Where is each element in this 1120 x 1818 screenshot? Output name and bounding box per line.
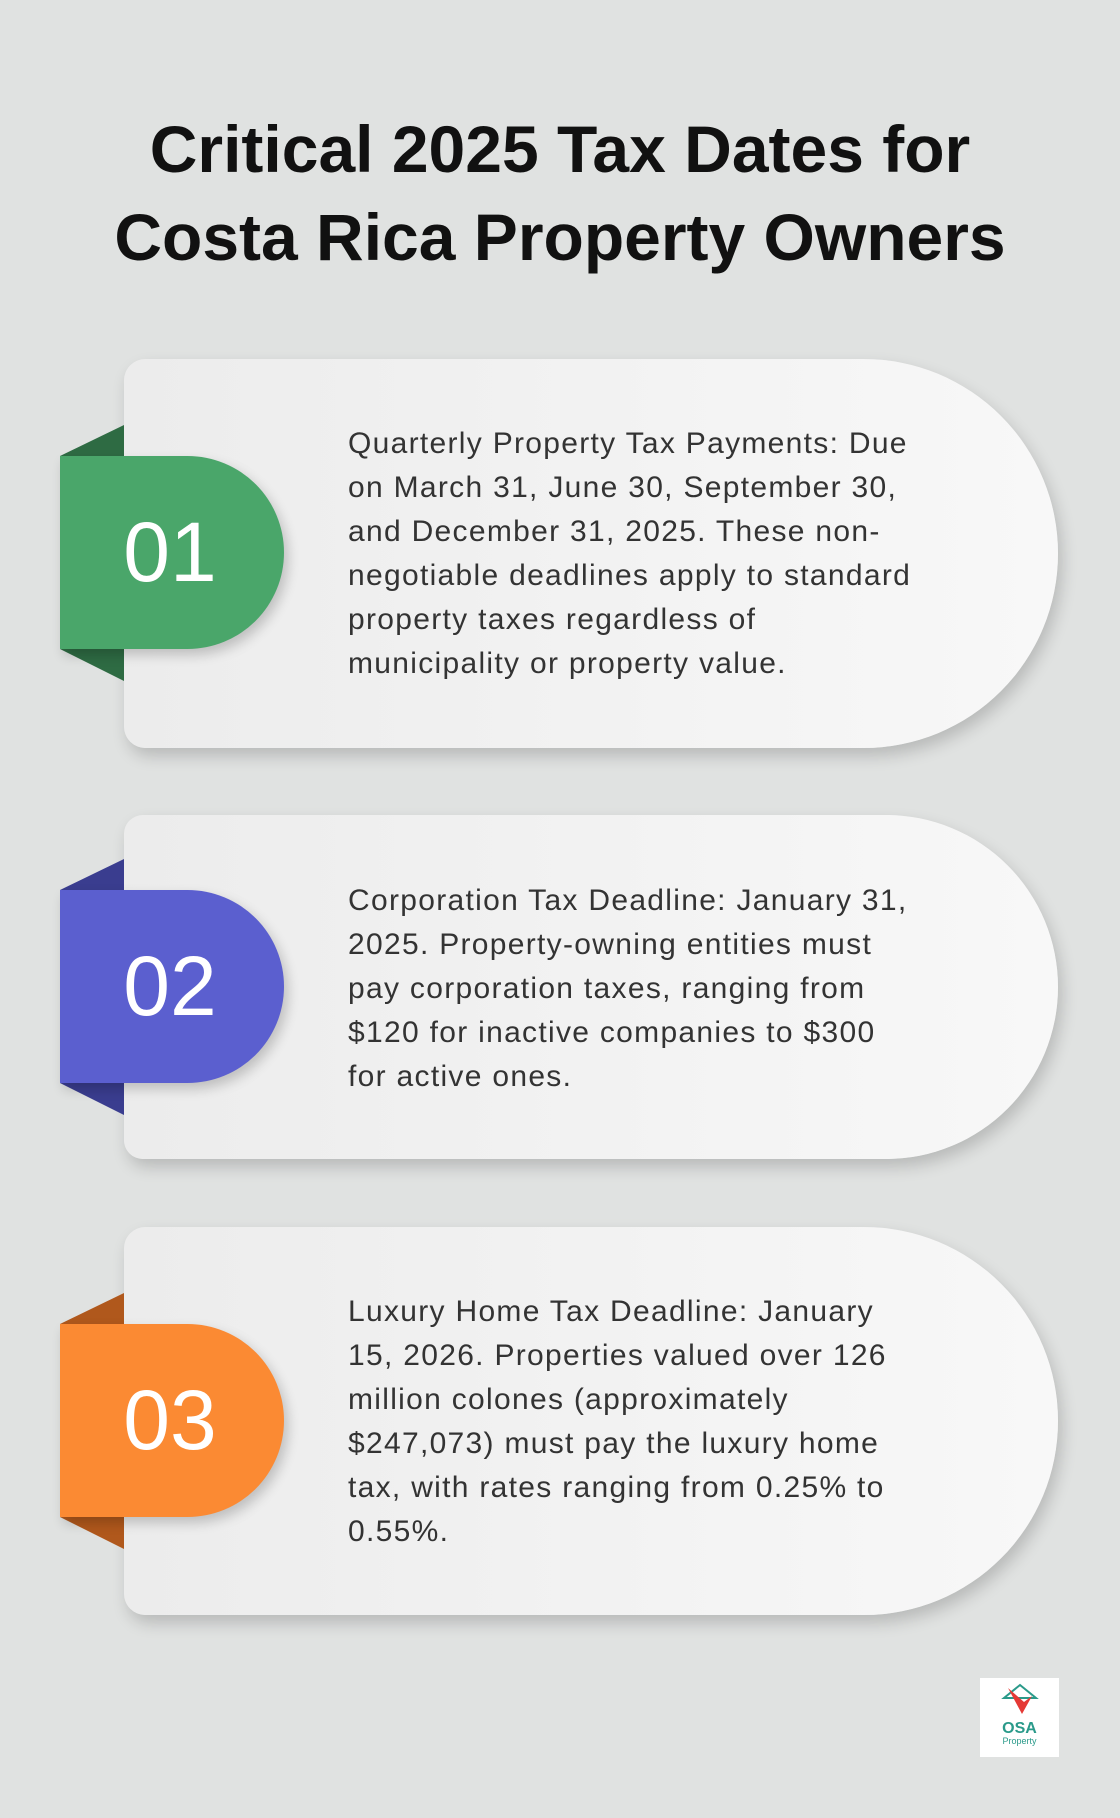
text block 3: million colones (approximately [348, 1383, 789, 1416]
badge 03 [60, 1324, 284, 1517]
title [114, 112, 1006, 274]
badge 01: 01 [123, 505, 217, 599]
text block 1: and December 31, 2025. These non- [348, 515, 881, 548]
icon: fold top 3 [60, 1293, 124, 1324]
text block 2: Corporation Tax Deadline: January 31, [348, 884, 908, 917]
text block 1: municipality or property value. [348, 647, 787, 680]
text block 2: $120 for inactive companies to $300 [348, 1016, 875, 1049]
icon: fold top 1 [60, 425, 124, 456]
panel: card 3 [124, 1227, 1058, 1615]
logo [980, 1678, 1059, 1757]
logo: Property [1002, 1736, 1036, 1746]
badge 03: 03 [123, 1373, 217, 1467]
icon: fold bottom 2 [60, 1083, 124, 1115]
text block 1: property taxes regardless of [348, 603, 756, 636]
text block 3: tax, with rates ranging from 0.25% to [348, 1471, 885, 1504]
title: Critical 2025 Tax Dates for [150, 112, 970, 186]
text block 1: on March 31, June 30, September 30, [348, 471, 897, 504]
text block 2: pay corporation taxes, ranging from [348, 972, 865, 1005]
text block 3 [348, 1295, 887, 1548]
text block 2: for active ones. [348, 1060, 572, 1093]
icon: fold top 2 [60, 859, 124, 890]
badge 01 [60, 456, 284, 649]
text block 1: Quarterly Property Tax Payments: Due [348, 427, 908, 460]
panel: card 2 [124, 815, 1058, 1159]
badge 02: 02 [123, 939, 217, 1033]
icon: fold bottom 3 [60, 1517, 124, 1549]
panel: card 1 [124, 359, 1058, 748]
text block 3: $247,073) must pay the luxury home [348, 1427, 879, 1460]
title: Costa Rica Property Owners [114, 200, 1006, 274]
text block 2 [348, 884, 908, 1093]
icon: fold bottom 1 [60, 649, 124, 681]
logo: OSA [1002, 1720, 1037, 1737]
text block 3: 0.55%. [348, 1515, 449, 1548]
text block 3: 15, 2026. Properties valued over 126 [348, 1339, 887, 1372]
text block 2: 2025. Property-owning entities must [348, 928, 872, 961]
text block 1 [348, 427, 911, 680]
badge 02 [60, 890, 284, 1083]
text block 3: Luxury Home Tax Deadline: January [348, 1295, 874, 1328]
text block 1: negotiable deadlines apply to standard [348, 559, 911, 592]
